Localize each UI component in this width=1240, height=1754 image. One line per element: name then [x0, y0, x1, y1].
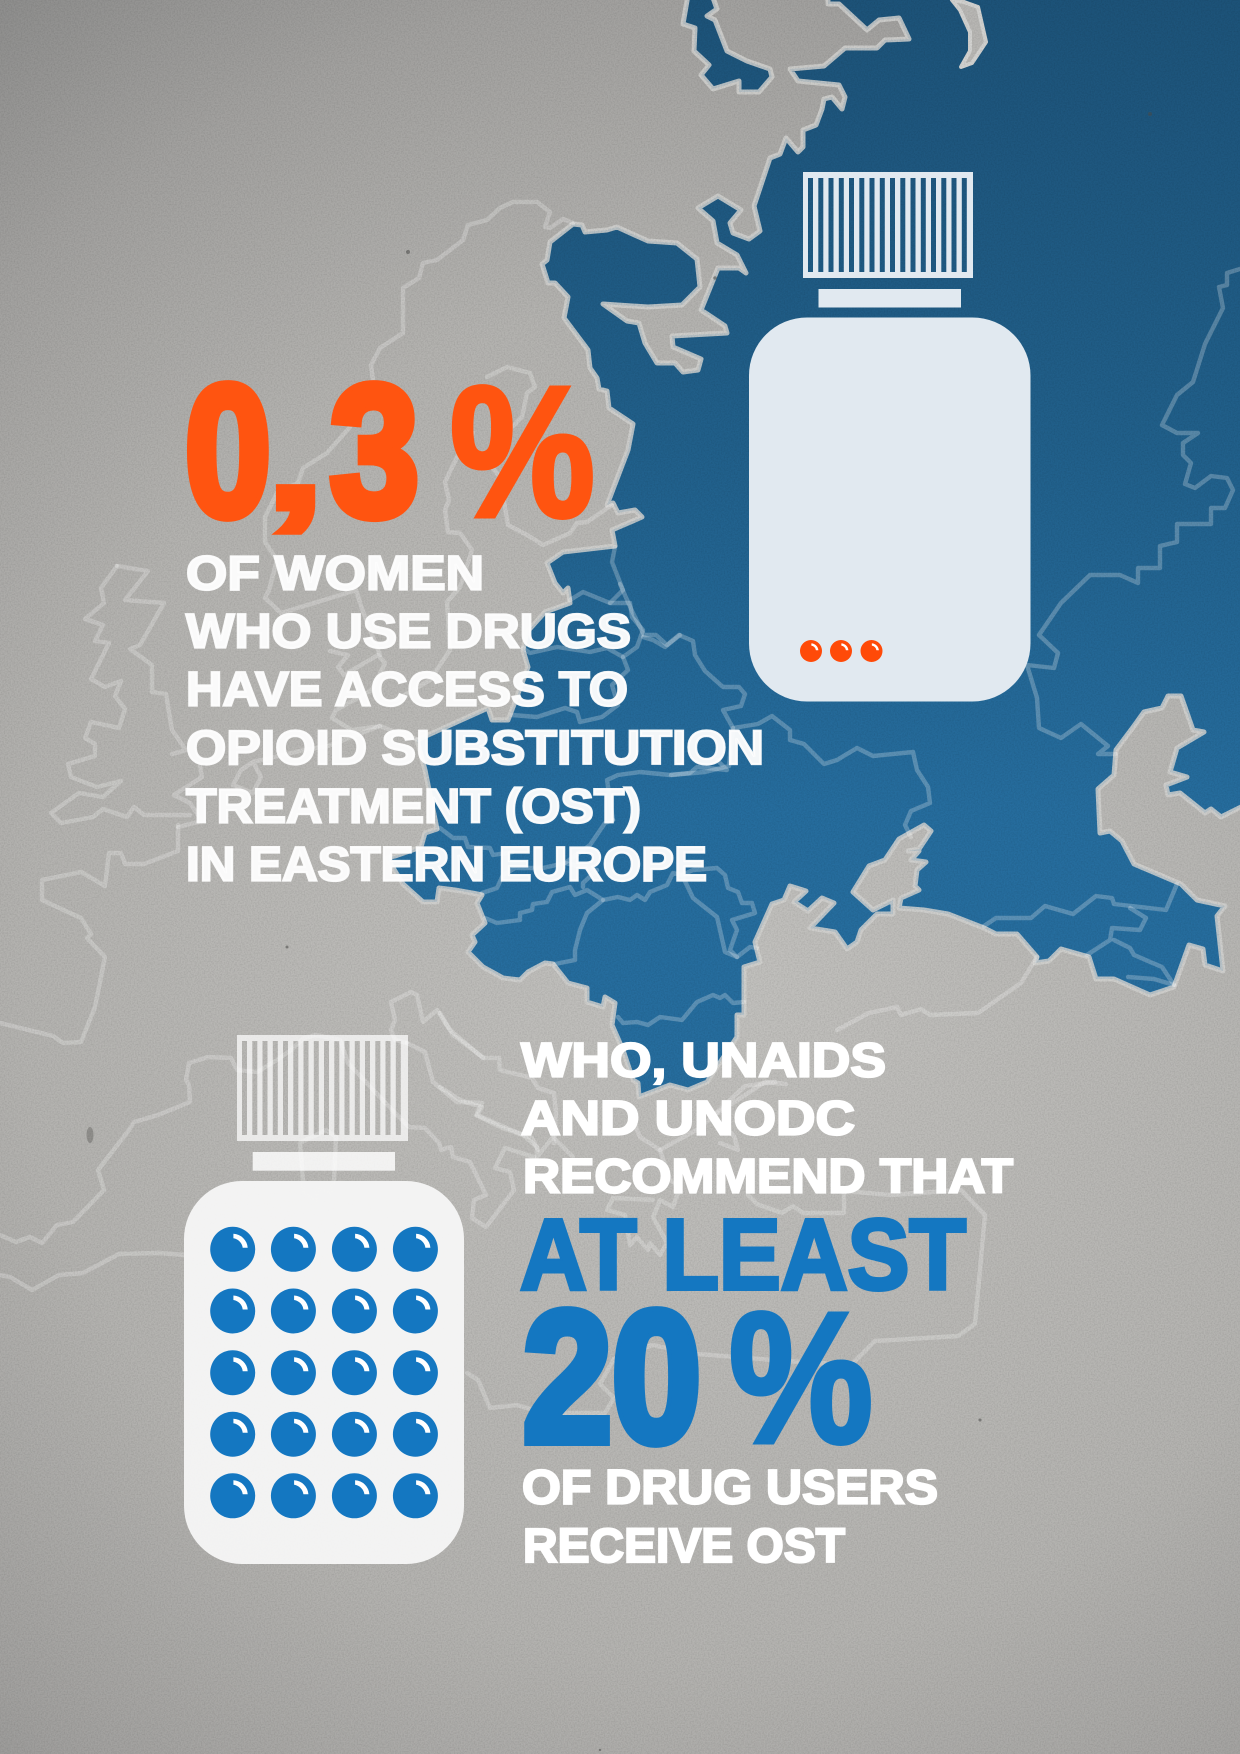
eastern Europe region — [387, 0, 1240, 1097]
text: women who use drugs: OF WOMEN — [186, 546, 484, 600]
statistic: 0,3 %: % — [450, 349, 595, 556]
northern inlet — [683, 0, 772, 92]
text: women who use drugs — [186, 546, 764, 892]
headline: at least 20 %: 20 — [523, 1274, 701, 1481]
three orange pills — [800, 640, 882, 662]
text: WHO, UNAIDS and UNODC recommendation: AND UNODC — [521, 1092, 855, 1146]
text: women who use drugs: WHO USE DRUGS — [186, 604, 631, 658]
statistic: 0,3 %: , — [264, 373, 327, 541]
text: of drug users receive OST — [522, 1460, 938, 1573]
icon: pill bottle with twenty blue pills — [184, 1035, 464, 1564]
headline: at least 20 %: AT LEAST — [520, 1199, 966, 1311]
statistic: 0,3 % — [185, 348, 595, 556]
text: of drug users receive OST: OF DRUG USERS — [522, 1460, 938, 1514]
icon: pill bottle with three orange pills — [749, 172, 1030, 702]
text: women who use drugs: OPIOID SUBSTITUTION — [186, 721, 764, 775]
northern island — [952, 0, 986, 67]
text: women who use drugs: IN EASTERN EUROPE — [186, 838, 707, 892]
text: WHO, UNAIDS and UNODC recommendation — [521, 1034, 1013, 1204]
text: women who use drugs: TREATMENT (OST) — [186, 780, 641, 834]
text: of drug users receive OST: RECEIVE OST — [523, 1519, 845, 1573]
text: women who use drugs: HAVE ACCESS TO — [186, 662, 628, 716]
country borders — [0, 202, 1240, 1413]
text: WHO, UNAIDS and UNODC recommendation: RECOMMEND THAT — [523, 1150, 1013, 1204]
bottle body — [749, 318, 1030, 702]
twenty blue pills — [210, 1227, 438, 1518]
bottle body — [184, 1181, 464, 1564]
bottle cap — [803, 172, 973, 278]
statistic: 0,3 %: 3 — [330, 348, 419, 555]
headline: at least 20 %: % — [729, 1275, 873, 1482]
bottle cap — [237, 1035, 408, 1141]
bottle neck — [253, 1152, 395, 1171]
bottle neck — [818, 289, 961, 308]
statistic: 0,3 %: 0 — [185, 348, 271, 555]
text: WHO, UNAIDS and UNODC recommendation: WHO, UNAIDS — [521, 1034, 886, 1088]
headline: at least 20 % — [520, 1199, 966, 1482]
